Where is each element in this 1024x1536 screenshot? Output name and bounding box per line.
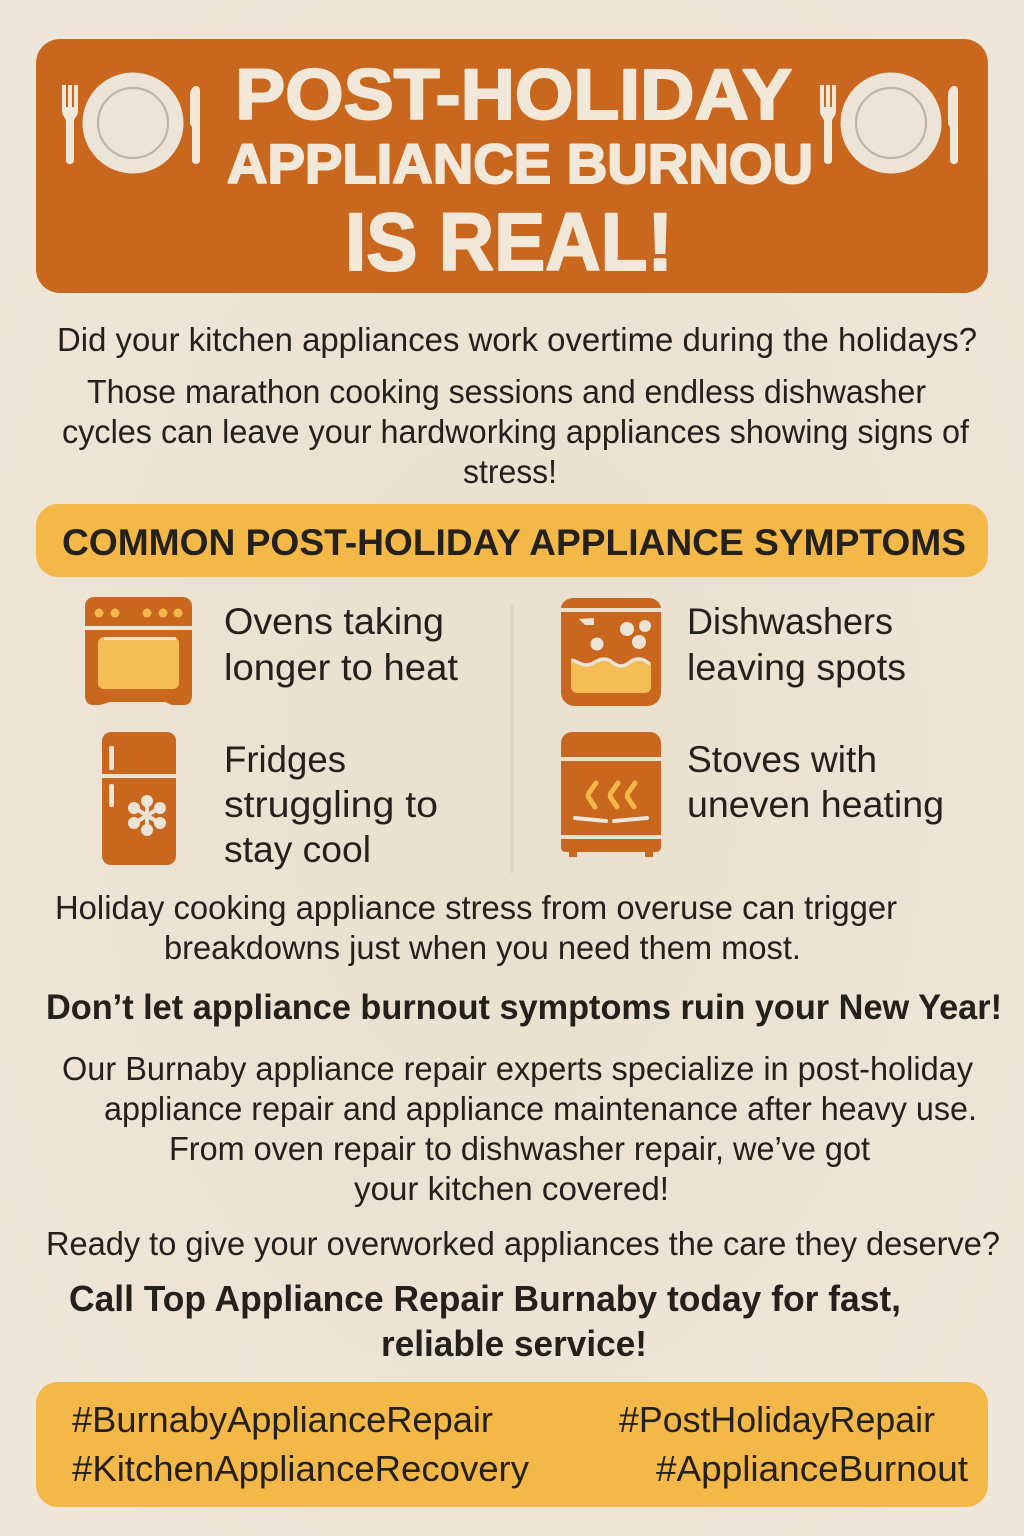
title line 1: POST-HOLIDAY bbox=[235, 56, 792, 135]
icon: right plate and cutlery bbox=[820, 72, 958, 174]
hashtag panel: #BurnabyApplianceRepair bbox=[72, 1399, 493, 1440]
symptom text: stay cool bbox=[224, 829, 371, 870]
symptom text: leaving spots bbox=[687, 647, 906, 688]
services text: Our Burnaby appliance repair experts specialize in post-holiday bbox=[62, 1050, 973, 1087]
symptom text: Fridges bbox=[224, 739, 346, 780]
title line 2: APPLIANCE BURNOU bbox=[227, 132, 813, 195]
services text: your kitchen covered! bbox=[354, 1170, 669, 1207]
services text bbox=[62, 1050, 977, 1207]
symptom text: Stoves with bbox=[687, 739, 877, 780]
icon: fridge bbox=[102, 732, 176, 865]
symptom: fridge bbox=[102, 732, 438, 870]
question text: Ready to give your overworked appliances the care they deserve? bbox=[46, 1225, 1000, 1262]
icon: left plate and cutlery bbox=[62, 72, 200, 174]
hashtag panel bbox=[36, 1382, 988, 1507]
symptoms heading bar bbox=[36, 504, 988, 577]
symptom text bbox=[687, 601, 906, 688]
symptom: dishwasher bbox=[561, 598, 906, 706]
symptom text: Ovens taking bbox=[224, 601, 444, 642]
symptom text bbox=[224, 601, 459, 688]
symptom text bbox=[687, 739, 944, 825]
intro text: Those marathon cooking sessions and endless dishwasher bbox=[87, 373, 926, 410]
services text: From oven repair to dishwasher repair, we’ve got bbox=[169, 1130, 870, 1167]
hashtag panel: #KitchenApplianceRecovery bbox=[72, 1448, 529, 1489]
symptom text bbox=[224, 739, 438, 870]
icon: dishwasher bbox=[561, 598, 661, 706]
symptoms heading bar: COMMON POST-HOLIDAY APPLIANCE SYMPTOMS bbox=[62, 522, 966, 563]
hashtag panel: #ApplianceBurnout bbox=[656, 1448, 968, 1489]
bold callout: Don’t let appliance burnout symptoms ruin your New Year! bbox=[46, 988, 1002, 1027]
call to action: reliable service! bbox=[381, 1323, 647, 1364]
warning text: breakdowns just when you need them most. bbox=[164, 929, 801, 966]
title banner bbox=[36, 39, 988, 293]
intro text bbox=[57, 321, 977, 490]
symptom: stove bbox=[561, 732, 944, 857]
warning text bbox=[55, 889, 897, 966]
intro text: stress! bbox=[463, 453, 557, 490]
title line 3: IS REAL! bbox=[345, 197, 673, 288]
symptom text: uneven heating bbox=[687, 784, 944, 825]
intro text: Did your kitchen appliances work overtime during the holidays? bbox=[57, 321, 977, 358]
hashtag panel: #PostHolidayRepair bbox=[619, 1399, 935, 1440]
warning text: Holiday cooking appliance stress from overuse can trigger bbox=[55, 889, 897, 926]
call to action: Call Top Appliance Repair Burnaby today for fast, bbox=[69, 1278, 901, 1319]
symptom text: struggling to bbox=[224, 784, 438, 825]
icon: oven bbox=[85, 597, 192, 705]
intro text: cycles can leave your hardworking appliances showing signs of bbox=[62, 413, 970, 450]
icon: stove bbox=[561, 732, 661, 857]
symptom text: Dishwashers bbox=[687, 601, 893, 642]
symptom: oven bbox=[85, 597, 459, 705]
services text: appliance repair and appliance maintenance after heavy use. bbox=[104, 1090, 977, 1127]
symptom text: longer to heat bbox=[224, 647, 459, 688]
call to action bbox=[69, 1278, 901, 1364]
